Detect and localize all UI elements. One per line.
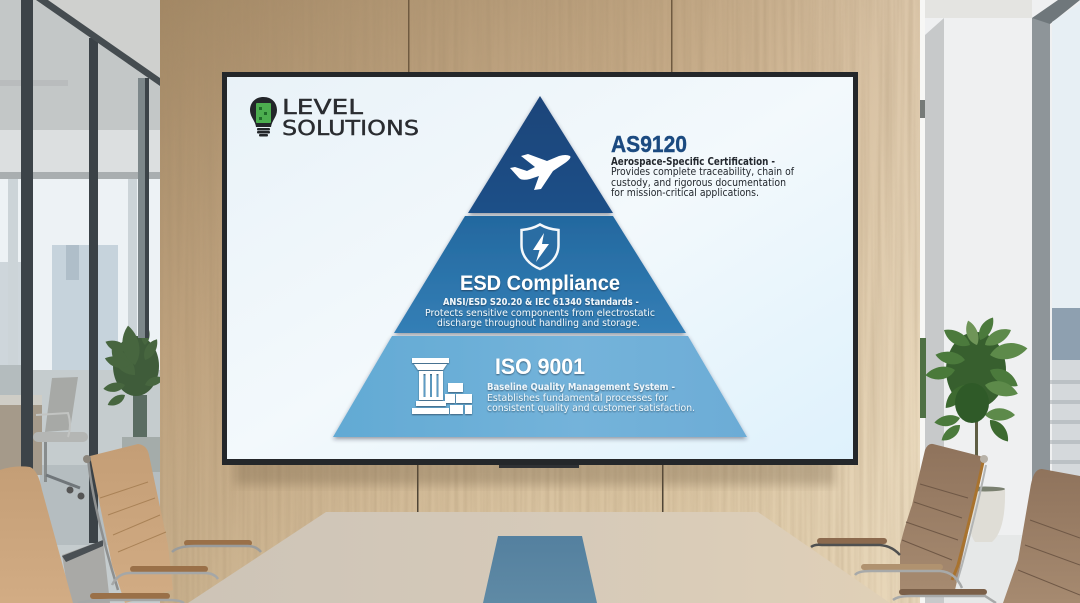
text: ISO description: Establishes fundamental processes for xyxy=(487,393,669,404)
text: AS9120 description: Provides complete traceability, chain of xyxy=(611,166,794,178)
heading: ESD Compliance: ESD Compliance xyxy=(460,272,620,295)
icon: shield with lightning bolt xyxy=(522,224,558,269)
text: AS9120 description: for mission-critical applications. xyxy=(611,187,759,199)
icon: pillar and bricks xyxy=(412,358,472,414)
icon: circuit light bulb xyxy=(250,97,277,136)
right second chair xyxy=(811,444,996,603)
left near chair xyxy=(0,466,73,603)
panel: ESD Compliance tier xyxy=(394,216,686,333)
text: ISO description: Baseline Quality Management System - xyxy=(487,382,675,393)
text: ISO description xyxy=(487,382,695,414)
background office chair xyxy=(33,377,88,500)
text: AS9120 description xyxy=(611,156,794,199)
panel: AS9120 tier xyxy=(468,96,613,213)
table center runner xyxy=(483,536,597,603)
heading: AS9120: AS9120 xyxy=(611,131,687,157)
left second chair xyxy=(78,444,261,603)
text: AS9120 description: Aerospace-Specific Certification - xyxy=(611,156,775,168)
text: ESD description: discharge throughout handling and storage. xyxy=(437,318,640,329)
text: ISO description: consistent quality and customer satisfaction. xyxy=(487,403,695,414)
text: AS9120 description: custody, and rigorous documentation xyxy=(611,177,786,189)
text: ESD description: ANSI/ESD S20.20 & IEC 61340 Standards - xyxy=(443,297,639,308)
logo wordmark: LEVEL xyxy=(282,95,364,119)
logo: Level Solutions xyxy=(250,95,419,140)
logo wordmark xyxy=(282,95,419,140)
pyramid xyxy=(333,96,747,437)
wood panel wall xyxy=(160,0,920,603)
wall-mounted display xyxy=(222,72,858,468)
right near chair xyxy=(1003,469,1080,603)
icon: airplane xyxy=(510,154,570,190)
logo wordmark: SOLUTIONS xyxy=(282,116,419,140)
left glass office background xyxy=(0,0,160,603)
text: ESD description xyxy=(425,297,655,329)
left potted plant behind glass xyxy=(103,324,165,472)
conference table xyxy=(188,512,890,603)
panel: ISO 9001 tier xyxy=(333,336,747,437)
right room wall and window xyxy=(920,0,1080,603)
right potted plant xyxy=(924,315,1029,542)
left glass mullions xyxy=(21,0,160,562)
heading: ISO 9001: ISO 9001 xyxy=(495,354,585,379)
text: ESD description: Protects sensitive components from electrostatic xyxy=(425,308,655,319)
